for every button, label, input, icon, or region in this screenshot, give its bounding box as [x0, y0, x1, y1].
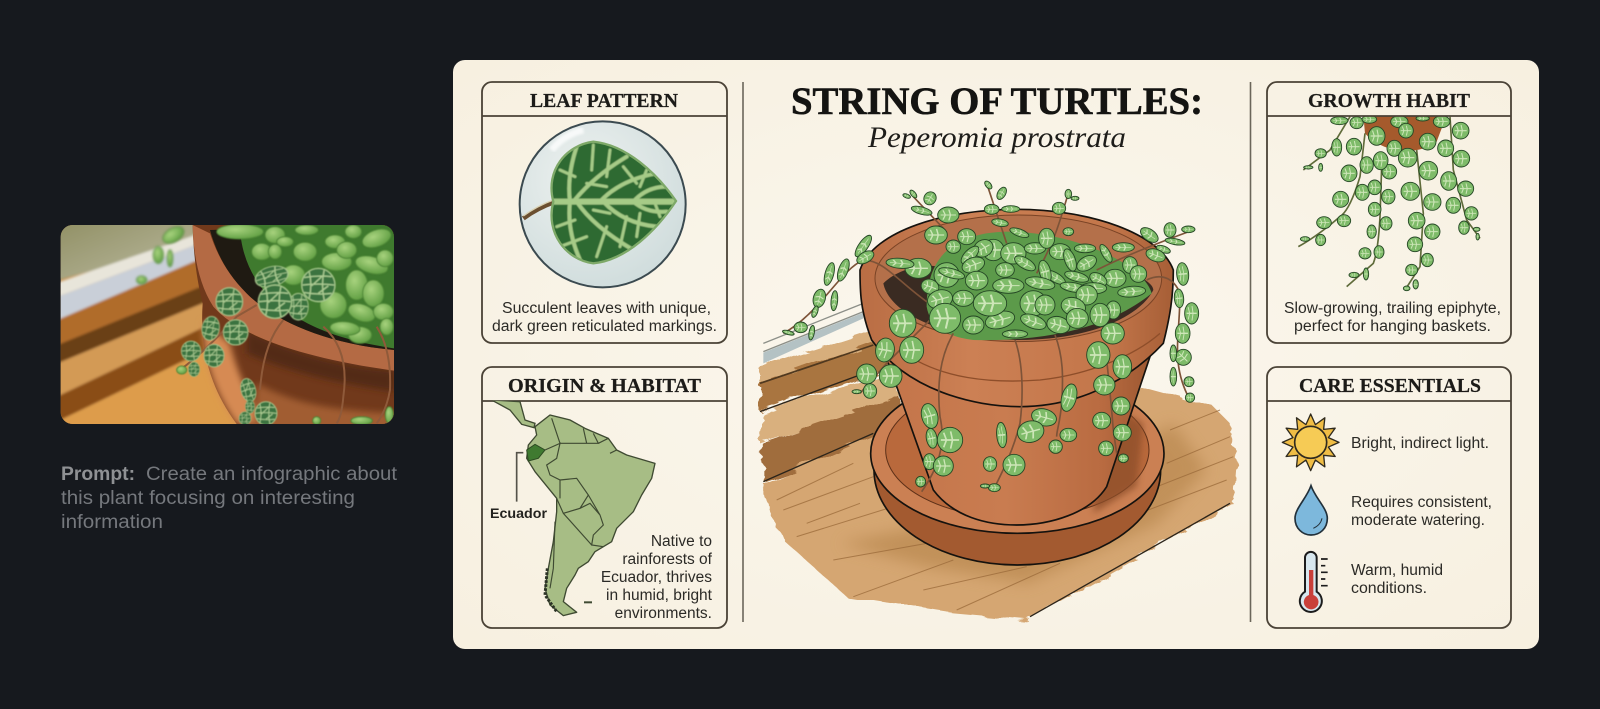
map: South America [492, 400, 655, 616]
panel: origin and habitat [482, 367, 727, 628]
text: watering: moderate watering. [1351, 512, 1485, 529]
panel: leaf pattern [482, 82, 727, 343]
pot [860, 209, 1173, 525]
divider left [742, 82, 744, 622]
subtitle: Peperomia prostrata [867, 121, 1126, 154]
prompt text: this plant focusing on interesting [61, 488, 355, 509]
plant leaves [782, 180, 1199, 492]
text: growth description: Slow-growing, trailing epiphyte, [1284, 300, 1501, 317]
text: habitat description: Native to [651, 533, 712, 550]
heading: growth habit: GROWTH HABIT [1308, 91, 1470, 112]
text: habitat description: rainforests of [622, 551, 713, 568]
panel: growth habit [1267, 82, 1511, 343]
prompt text: Prompt: [61, 464, 135, 485]
illustration: trailing vines [1298, 115, 1480, 291]
text: habitat description: in humid, bright [606, 587, 713, 604]
saucer [871, 373, 1164, 565]
text: habitat description: environments. [615, 605, 712, 622]
text: leaf description: dark green reticulated markings. [492, 318, 717, 335]
prompt text: information [61, 512, 163, 533]
text: habitat description [601, 533, 713, 622]
text: leaf description: Succulent leaves with unique, [502, 300, 711, 317]
text: growth description: perfect for hanging baskets. [1294, 318, 1491, 335]
photo of the plant [53, 218, 394, 430]
panel: infographic card [453, 60, 1539, 649]
prompt text [61, 464, 398, 533]
plant stems [783, 183, 1193, 492]
text: leaf description [492, 300, 717, 335]
label: Ecuador: Ecuador [490, 505, 548, 521]
text: temperature: Warm, humid [1351, 562, 1443, 579]
text: watering: Requires consistent, [1351, 494, 1492, 511]
icon: thermometer [1300, 552, 1328, 612]
text: habitat description: Ecuador, thrives [601, 569, 712, 586]
heading: leaf pattern: LEAF PATTERN [530, 91, 678, 112]
heading: origin and habitat: ORIGIN & HABITAT [508, 376, 701, 397]
window sill and table [760, 303, 1237, 620]
text: growth description [1284, 300, 1501, 335]
heading: care essentials: CARE ESSENTIALS [1299, 376, 1481, 397]
divider right [1250, 82, 1252, 622]
icon: sun [1282, 414, 1339, 471]
icon: magnified leaf [520, 121, 686, 287]
title: STRING OF TURTLES: [791, 79, 1203, 123]
text: watering [1351, 494, 1492, 529]
icon: water drop [1295, 486, 1327, 535]
panel: care essentials [1267, 367, 1511, 628]
text: temperature: conditions. [1351, 580, 1427, 597]
text: temperature [1351, 562, 1443, 597]
illustration: potted plant on wooden sill [760, 180, 1237, 620]
prompt text: Create an infographic about [146, 464, 398, 485]
text: light: Bright, indirect light. [1351, 435, 1489, 452]
